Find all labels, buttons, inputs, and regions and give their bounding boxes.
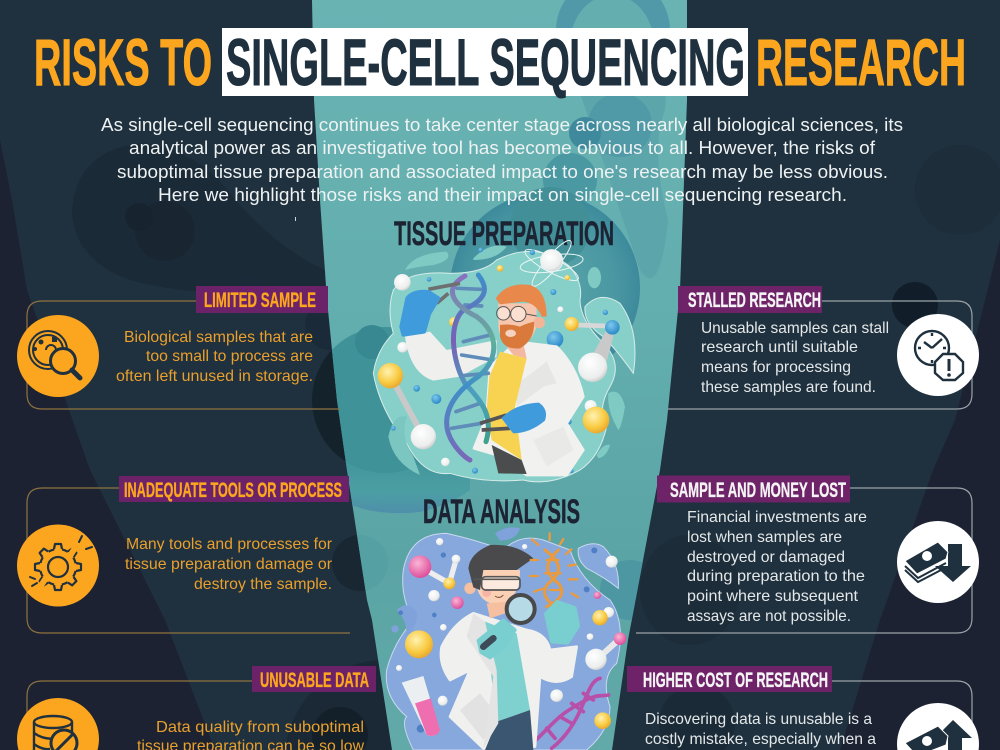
label: stalled research [678,286,822,313]
intro text: analytical power as an investigative tool has become obvious to all. However, the risks of [129,137,876,158]
intro text [101,114,903,205]
heading: tissue preparation: TISSUE PREPARATION [394,215,614,253]
molecules and balls [378,248,620,474]
text: sample and money lost: during preparation to the [687,568,865,585]
text: limited sample [116,329,313,385]
panel: unusable data [17,666,376,750]
orange DNA with rays [530,533,578,608]
gloves and forceps [428,283,460,303]
text: stalled research: these samples are found. [701,379,876,396]
icon: database with ban sign [17,698,99,750]
icon: clock with warning [897,314,979,396]
DNA helix [447,275,494,460]
scientist body [474,342,583,475]
text: unusable data: Data quality from suboptimal [156,719,364,736]
text: stalled research: means for processing [701,359,851,376]
text: stalled research [701,320,889,396]
text: sample and money lost: assays are not possible. [687,608,851,625]
panel: sample and money lost [636,476,979,633]
text: limited sample: often left unused in storage. [116,368,313,385]
panel: higher cost of research [627,666,979,750]
label: limited sample [196,286,328,313]
panel: inadequate tools or process [17,476,350,633]
atom [519,237,584,290]
text: unusable data [137,719,364,750]
text: higher cost of research: Discovering data is unusable is a [645,711,872,728]
text: sample and money lost: Financial investments are [687,509,867,526]
label: higher cost of research [627,666,832,692]
text: sample and money lost [687,509,867,625]
text: stalled research: research until suitable [701,339,858,356]
text: limited sample: too small to process are [146,348,313,365]
title highlight box [222,28,748,96]
label: sample and money lost [657,476,850,502]
label: unusable data: UNUSABLE DATA [260,669,369,692]
label: higher cost of research: HIGHER COST OF RESEARCH [643,669,828,692]
intro text: suboptimal tissue preparation and associated impact to one's research may be less obvious. [117,161,888,182]
text: higher cost of research: costly mistake, especially when a [645,731,876,748]
text: higher cost of research [645,711,876,748]
intro text: Here we highlight those risks and their impact on single-cell sequencing research. [158,184,847,205]
text: inadequate tools: Many tools and processes for [126,536,333,553]
molecules and balls [420,560,456,583]
intro text: As single-cell sequencing continues to take center stage across nearly all biological sciences, its [101,114,903,135]
title [34,25,966,99]
magnifier and gloves [546,602,578,643]
text: sample and money lost: destroyed or damaged [687,549,845,566]
heading: data analysis: DATA ANALYSIS [423,493,580,531]
text: inadequate tools: tissue preparation damage or [125,556,333,573]
central teal beam [310,0,687,750]
text: inadequate tools [125,536,333,593]
panel: stalled research [668,286,979,409]
text: sample and money lost: lost when samples are [687,529,842,546]
test tube [402,676,439,736]
illustration: tissue scientist with DNA [373,237,635,482]
label: inadequate tools or process: INADEQUATE TOOLS OR PROCESS [124,479,342,502]
icon: money with down arrow [897,521,979,603]
panel: limited sample [17,286,340,409]
pink DNA [536,678,609,748]
text: inadequate tools: destroy the sample. [194,576,332,593]
title part: RISKS TO: RISKS TO [34,25,212,99]
label: stalled research: STALLED RESEARCH [688,289,821,312]
illustration: data scientist with magnifier [386,527,626,750]
label: unusable data [252,666,376,692]
icon: broken gear [17,524,99,606]
label: inadequate tools or process [119,476,349,502]
text: stalled research: Unusable samples can stall [701,320,889,337]
label: sample and money lost: SAMPLE AND MONEY LOST [670,479,846,502]
scientist body [441,613,577,748]
label: limited sample: LIMITED SAMPLE [204,289,316,312]
text: sample and money lost: point where subsequent [687,588,859,605]
icon: petri dish with magnifier [17,315,99,397]
icon: money with up arrow [897,703,979,750]
text: limited sample: Biological samples that are [124,329,313,346]
